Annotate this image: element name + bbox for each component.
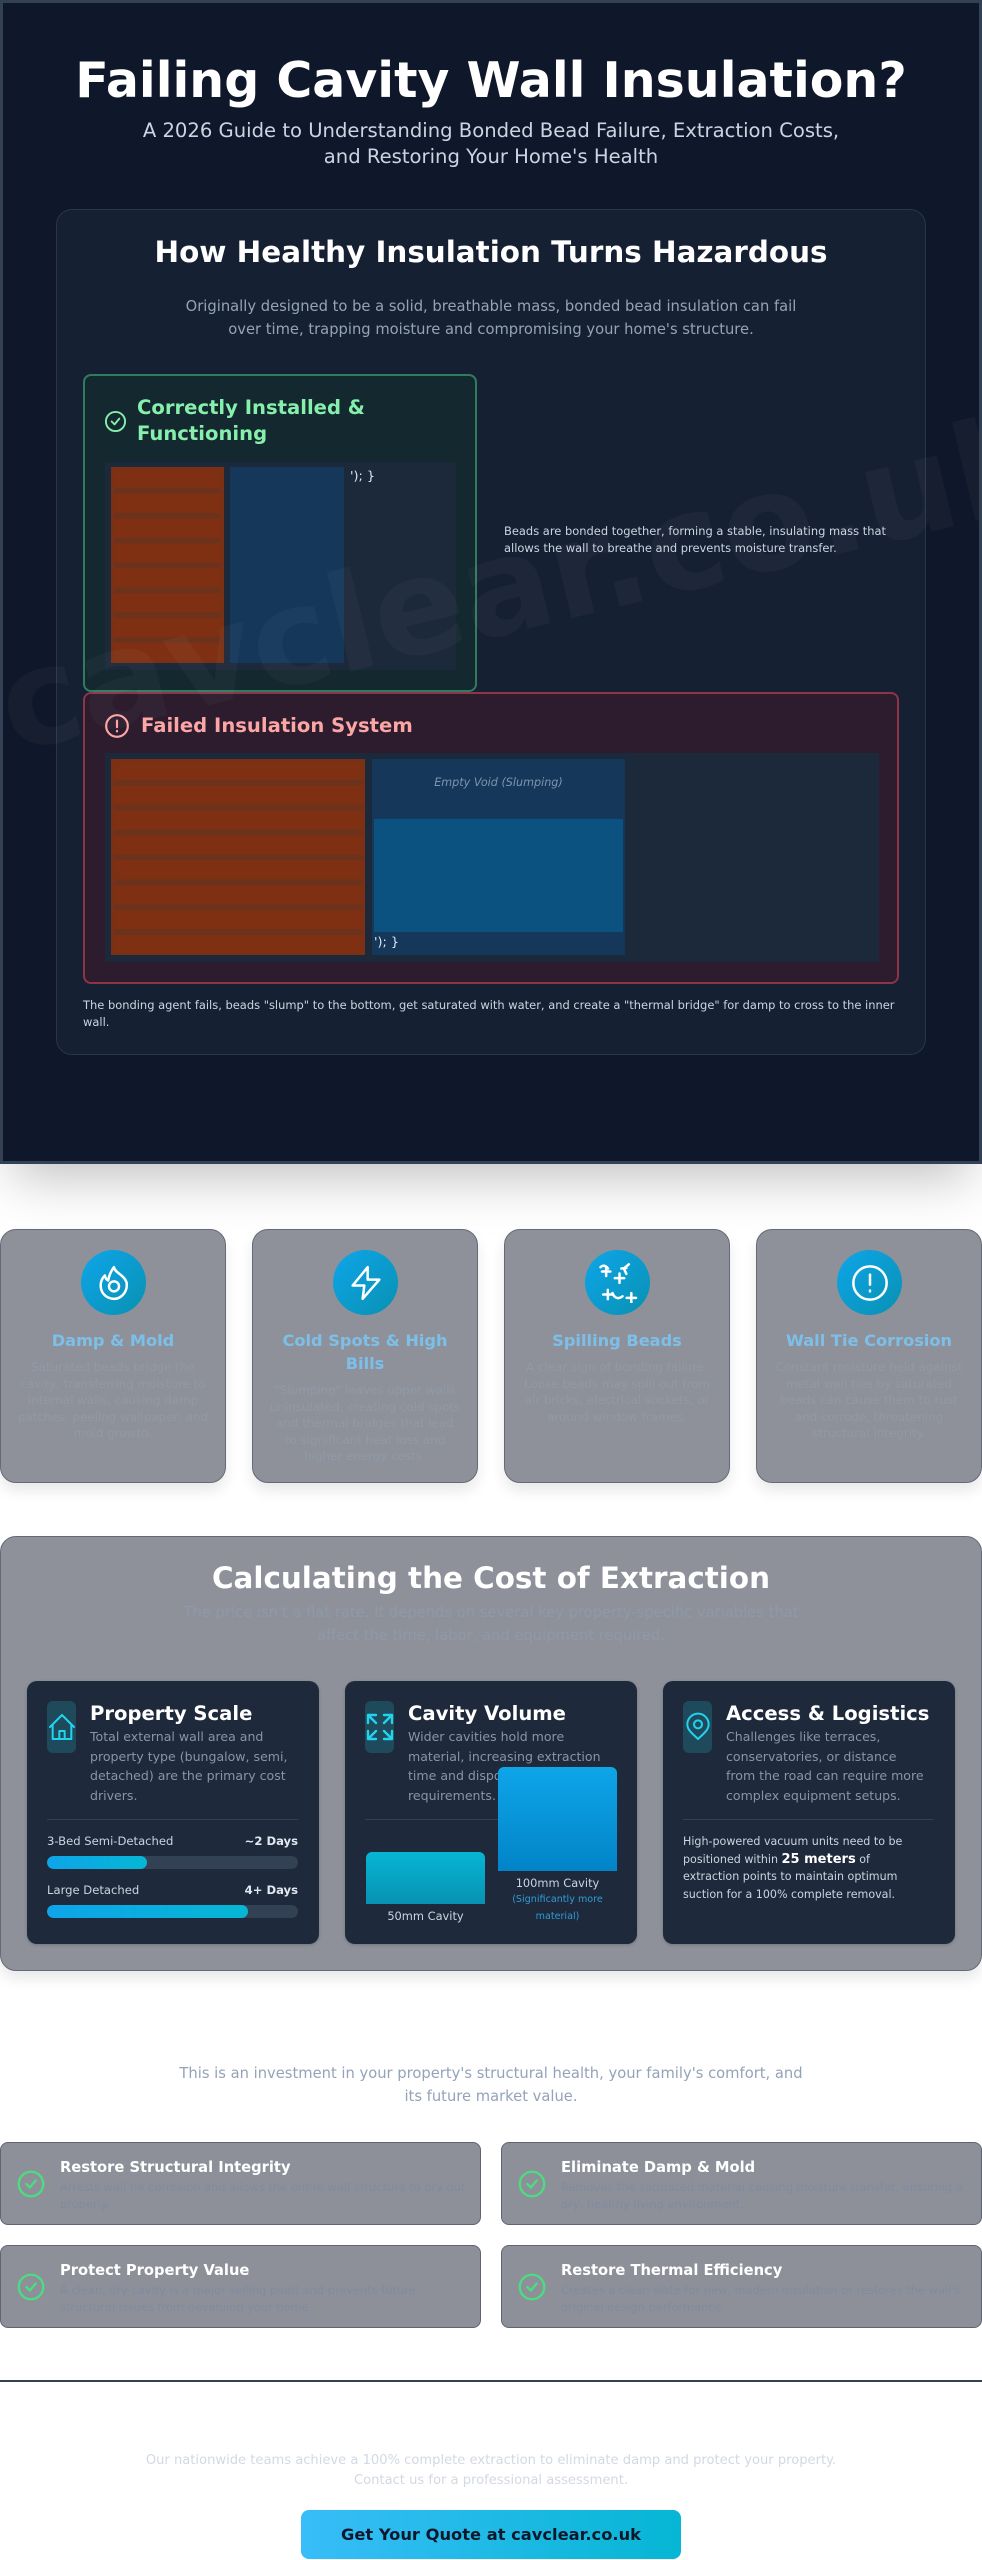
card: cold spots bbox=[252, 1229, 478, 1483]
description: structural issues from devaluing your home. bbox=[60, 2300, 312, 2314]
slumped beads bbox=[374, 819, 623, 932]
description: patches, peeling wallpaper, and bbox=[18, 1410, 208, 1424]
investment statement bbox=[179, 2065, 803, 2105]
value: 4 days: 4+ Days bbox=[245, 1883, 298, 1897]
description: drivers. bbox=[90, 1788, 137, 1803]
heading: Bills bbox=[346, 1354, 384, 1373]
description bbox=[561, 2283, 960, 2314]
benefit: property value bbox=[0, 2245, 481, 2328]
card: spilling beads bbox=[504, 1229, 730, 1483]
description: original design performance. bbox=[561, 2300, 725, 2314]
value: 2 days: ~2 Days bbox=[245, 1834, 298, 1848]
description bbox=[561, 2180, 963, 2210]
description bbox=[60, 2180, 465, 2210]
description: around window frames. bbox=[547, 1410, 687, 1424]
description: and thermal bridges that lead bbox=[276, 1416, 454, 1430]
heading: Wall Tie Corrosion bbox=[786, 1331, 952, 1350]
icon: alert circle bbox=[837, 1250, 902, 1315]
suction note bbox=[683, 1835, 902, 1900]
label: 3-bed: 3-Bed Semi-Detached bbox=[47, 1834, 173, 1848]
caption: correctly installed: Beads are bonded together, forming a stable, insulating mass that bbox=[504, 524, 886, 538]
note: significantly more material: material) bbox=[536, 1910, 579, 1922]
heading: correctly installed: Functioning bbox=[137, 422, 267, 445]
brick wall bbox=[111, 467, 224, 663]
suction note: positioned within 25 meters of bbox=[683, 1852, 870, 1866]
investment statement: This is an investment in your property's structural health, your family's comfort, and bbox=[179, 2065, 803, 2082]
cost intro text: affect the time, labor, and equipment required. bbox=[317, 1626, 665, 1644]
description: Saturated beads bridge the bbox=[31, 1360, 195, 1374]
icon: check bbox=[518, 2170, 546, 2198]
progress bar: large detached bbox=[47, 1905, 298, 1918]
button: get your quote: Get Your Quote at cavclear.co.uk bbox=[341, 2525, 641, 2544]
title: Failing Cavity Wall Insulation? bbox=[75, 52, 907, 109]
investment statement: its future market value. bbox=[404, 2088, 578, 2105]
description: Wider cavities hold more bbox=[408, 1729, 564, 1744]
description: Creates a clean slate for new, modern insulation or restores the wall's bbox=[561, 2283, 960, 2297]
diagram: healthy wall bbox=[105, 462, 456, 670]
description: and corrode, threatening bbox=[795, 1410, 943, 1424]
description: from the road can require more bbox=[726, 1768, 924, 1783]
heading: Protect Property Value bbox=[60, 2262, 249, 2279]
heading: Access & Logistics bbox=[726, 1702, 929, 1725]
card: cavity volume bbox=[345, 1681, 637, 1944]
panel: cost of extraction bbox=[0, 1536, 982, 1971]
diagram: failed wall bbox=[105, 753, 879, 962]
description: A clear sign of bonding failure. bbox=[526, 1360, 708, 1374]
description: material, increasing extraction bbox=[408, 1749, 601, 1764]
icon: scattered beads bbox=[585, 1250, 650, 1315]
description: Total external wall area and bbox=[90, 1729, 263, 1744]
description: conservatories, or distance bbox=[726, 1749, 897, 1764]
panel: failed insulation bbox=[83, 692, 899, 984]
note: significantly more material: (Significantly more bbox=[512, 1894, 603, 1905]
caption: correctly installed bbox=[504, 524, 886, 554]
cost intro text bbox=[184, 1604, 798, 1644]
heading: Cold Spots & High bbox=[282, 1331, 448, 1350]
label: large detached: Large Detached bbox=[47, 1883, 139, 1897]
hero panel bbox=[0, 0, 982, 1164]
description: mold growth. bbox=[74, 1426, 152, 1440]
description bbox=[408, 1729, 601, 1803]
bar: 100mm cavity bbox=[498, 1767, 617, 1871]
icon: expand arrows bbox=[365, 1701, 394, 1753]
description bbox=[776, 1360, 962, 1440]
card: damp and mold bbox=[0, 1229, 226, 1483]
bonded insulation bbox=[230, 467, 344, 663]
description: time and disposal bbox=[408, 1768, 519, 1783]
description: property type (bungalow, semi, bbox=[90, 1749, 288, 1764]
intro text: Originally designed to be a solid, breathable mass, bonded bead insulation can fail bbox=[186, 298, 796, 315]
subtitle bbox=[143, 119, 839, 168]
description: cavity, transferring moisture to bbox=[20, 1376, 206, 1390]
button: get your quote bbox=[301, 2510, 681, 2559]
icon: lightning bolt bbox=[333, 1250, 398, 1315]
icon: house bbox=[47, 1701, 76, 1753]
description: requirements. bbox=[408, 1788, 496, 1803]
caption: correctly installed: allows the wall to breathe and prevents moisture transfer. bbox=[504, 540, 837, 554]
empty void label: Empty Void (Slumping) bbox=[434, 776, 563, 789]
description: Removes the saturated material causing moisture transfer, ensuring a bbox=[561, 2180, 963, 2194]
heading: Restore Structural Integrity bbox=[60, 2159, 291, 2176]
card: property scale bbox=[27, 1681, 319, 1944]
heading: correctly installed: Correctly Installed & bbox=[137, 396, 365, 419]
heading: Spilling Beads bbox=[552, 1331, 682, 1350]
heading: Damp & Mold bbox=[52, 1331, 174, 1350]
description bbox=[60, 2283, 416, 2314]
suction note: suction for a 100% complete removal. bbox=[683, 1888, 895, 1900]
suction note: High-powered vacuum units need to be bbox=[683, 1835, 902, 1848]
stray code text: '); } bbox=[374, 935, 399, 950]
description: internal walls, causing damp bbox=[28, 1393, 198, 1407]
description: "Slumping" leaves upper walls bbox=[274, 1383, 456, 1397]
description: A clean, dry cavity is a major selling point and prevents future bbox=[60, 2283, 416, 2297]
icon: alert circle bbox=[105, 714, 129, 738]
description bbox=[270, 1383, 460, 1463]
footer text: Contact us for a professional assessment. bbox=[354, 2472, 628, 2488]
card: wall tie corrosion bbox=[756, 1229, 982, 1483]
label: 50mm: 50mm Cavity bbox=[387, 1909, 464, 1923]
heading: Property Scale bbox=[90, 1702, 252, 1725]
icon: map pin bbox=[683, 1701, 712, 1753]
description: Challenges like terraces, bbox=[726, 1729, 880, 1744]
description bbox=[524, 1360, 710, 1424]
caption: failed insulation: The bonding agent fails, beads "slump" to the bottom, get saturated with water, and create a "thermal bridge" for damp to cross to the inner bbox=[83, 998, 895, 1012]
icon: flame drop bbox=[81, 1250, 146, 1315]
description: uninsulated, creating cold spots bbox=[270, 1400, 460, 1414]
description: to significant heat loss and bbox=[285, 1432, 445, 1446]
caption: failed insulation: wall. bbox=[83, 1014, 109, 1028]
description bbox=[90, 1729, 288, 1803]
description: metal wall ties by saturated bbox=[786, 1376, 952, 1390]
description bbox=[726, 1729, 924, 1803]
heading: failed insulation: Failed Insulation System bbox=[141, 714, 413, 737]
subtitle: A 2026 Guide to Understanding Bonded Bead Failure, Extraction Costs, bbox=[143, 119, 839, 142]
description: higher energy costs. bbox=[304, 1449, 426, 1463]
heading: how healthy insulation: How Healthy Insulation Turns Hazardous bbox=[154, 235, 828, 269]
cavity with slumped beads bbox=[372, 759, 625, 955]
icon: check circle bbox=[104, 411, 126, 432]
label: 100mm: 100mm Cavity bbox=[516, 1876, 599, 1890]
panel: how insulation turns hazardous bbox=[56, 209, 926, 1055]
cost intro text: The price isn't a flat rate. It depends on several key property-specific variables that bbox=[184, 1604, 798, 1621]
intro text: over time, trapping moisture and compromising your home's structure. bbox=[228, 321, 754, 338]
description: properly. bbox=[60, 2196, 109, 2210]
stray code text: '); } bbox=[350, 469, 375, 484]
panel: correctly installed bbox=[83, 374, 477, 692]
caption: failed insulation bbox=[82, 998, 895, 1028]
note: significantly more material bbox=[512, 1894, 603, 1922]
description: air bricks, electrical sockets, or bbox=[525, 1393, 709, 1407]
benefit: thermal efficiency bbox=[501, 2245, 982, 2328]
brick wall bbox=[111, 759, 365, 955]
heading: cost of extraction: Calculating the Cost of Extraction bbox=[212, 1561, 770, 1595]
suction note: extraction points to maintain optimum bbox=[683, 1870, 897, 1883]
heading bbox=[282, 1331, 448, 1373]
heading: correctly installed bbox=[137, 396, 365, 445]
description: structural integrity. bbox=[812, 1426, 926, 1440]
intro text bbox=[186, 298, 796, 338]
heading: Cavity Volume bbox=[408, 1702, 566, 1725]
heading: Eliminate Damp & Mold bbox=[561, 2159, 755, 2176]
description: complex equipment setups. bbox=[726, 1788, 901, 1803]
icon: check bbox=[518, 2274, 546, 2300]
description: Constant moisture held against bbox=[776, 1360, 962, 1374]
heading: Restore Thermal Efficiency bbox=[561, 2262, 782, 2279]
subtitle: and Restoring Your Home's Health bbox=[324, 145, 658, 168]
description bbox=[18, 1360, 208, 1440]
description: detached) are the primary cost bbox=[90, 1768, 286, 1783]
description: Loose beads may spill out from bbox=[524, 1376, 710, 1390]
footer text bbox=[146, 2453, 836, 2488]
card: access and logistics bbox=[663, 1681, 955, 1944]
benefit: damp and mold bbox=[501, 2142, 982, 2225]
description: Arrests wall tie corrosion and allows the entire wall structure to dry out bbox=[60, 2180, 465, 2194]
icon: check bbox=[18, 2274, 44, 2300]
benefit: structural integrity bbox=[0, 2142, 481, 2225]
description: beads can cause them to rust bbox=[780, 1393, 958, 1407]
bar: 50mm cavity bbox=[366, 1852, 485, 1904]
progress bar: 3-bed bbox=[47, 1856, 298, 1869]
icon: check bbox=[18, 2170, 44, 2198]
footer text: Our nationwide teams achieve a 100% complete extraction to eliminate damp and protect your property. bbox=[146, 2453, 836, 2468]
description: dry, healthy living environment. bbox=[561, 2196, 744, 2210]
